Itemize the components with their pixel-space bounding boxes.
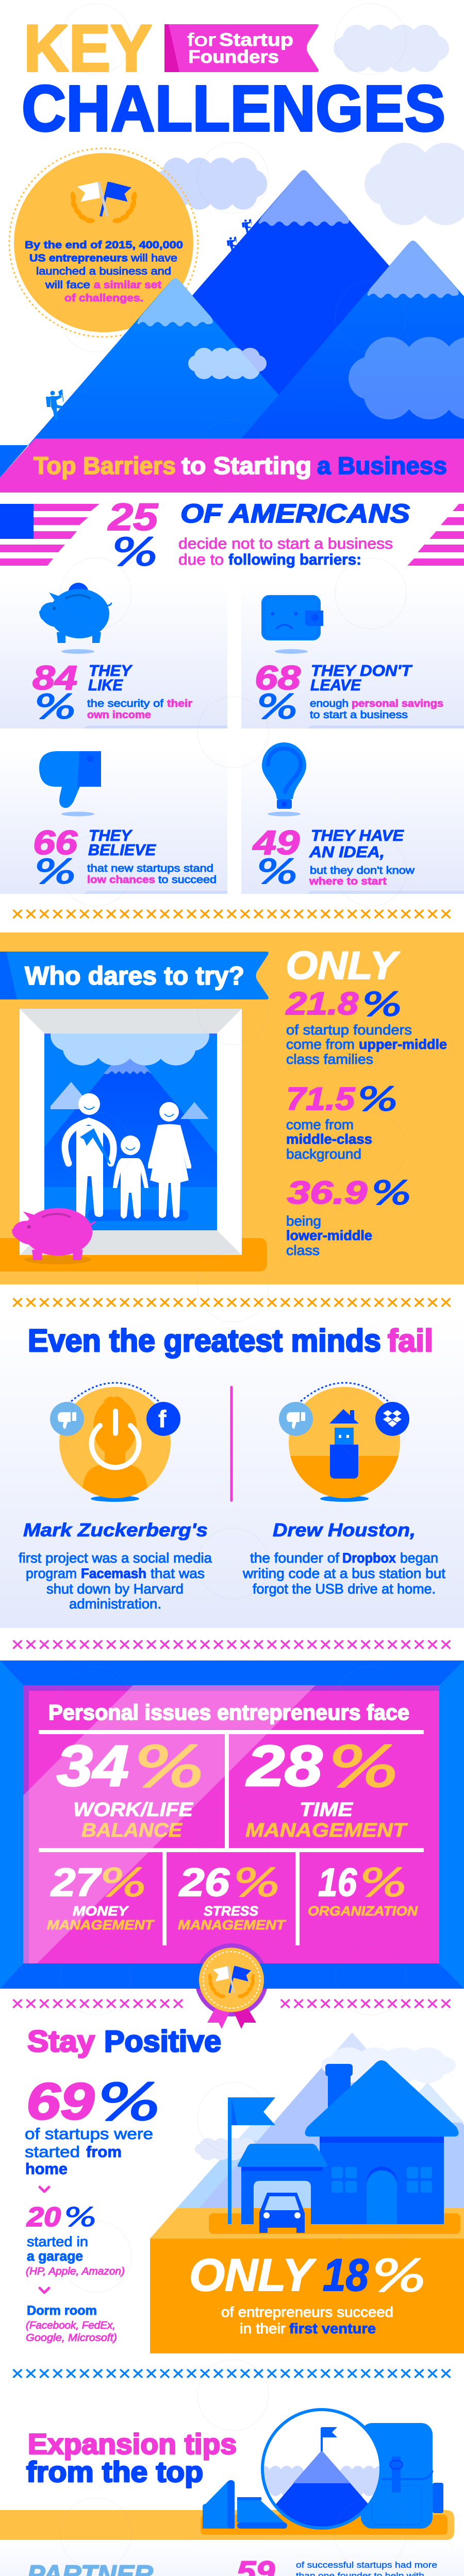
stat: 69%: %	[96, 2073, 162, 2131]
heading: stay positive: Positive	[104, 2025, 221, 2058]
heading: stay positive: Stay	[27, 2025, 95, 2058]
panel: barrier 66%: THEY	[89, 826, 133, 844]
cloud: lower right	[349, 337, 464, 419]
ribbon: who dares to try: Who dares to try?	[25, 961, 244, 990]
text: Drew Houston: Drew Houston,	[273, 1519, 416, 1540]
stat: only 18%: in their	[240, 2320, 286, 2336]
cloud: on front mountain	[188, 348, 267, 379]
text: Mark Zuckerberg: Mark Zuckerberg's	[23, 1519, 208, 1540]
stat: 20% garage: a garage	[27, 2248, 83, 2264]
stat: 71.5%	[286, 1080, 399, 1162]
panel: barrier 68%: 68	[255, 658, 301, 697]
arrow: chevron down	[40, 2187, 49, 2192]
figure: mother	[148, 1102, 191, 1218]
heading: expansion tips	[26, 2428, 237, 2488]
stat: 36.9%: being	[286, 1213, 321, 1229]
stat: 20% garage: %	[63, 2202, 97, 2232]
stat: 27%: %	[99, 1861, 148, 1905]
cloud: top right	[334, 25, 449, 72]
stat: 36.9%: lower-middle	[286, 1228, 372, 1243]
ribbon: for Startup Founders: Startup	[219, 30, 293, 50]
arrow: chevron down	[40, 2288, 49, 2293]
text: dorm room: (Facebook, FedEx,	[26, 2320, 115, 2331]
panel: barrier 68%: enough	[310, 698, 349, 709]
panel: barrier 84%: the security of	[87, 698, 164, 709]
banner: top barriers: a Business	[317, 452, 447, 479]
stat: 27%: 27	[50, 1860, 102, 1905]
stat: 34%: %	[132, 1735, 207, 1800]
icon: pink piggy bank	[8, 1208, 95, 1264]
text: Mark Zuckerberg: program	[26, 1566, 77, 1581]
stat: only 18%: 18	[323, 2249, 369, 2300]
panel: barrier 68%: LEAVE	[310, 676, 361, 694]
stat: 69%: 69	[26, 2073, 94, 2130]
icon: thumbs down	[39, 751, 101, 816]
stat: 21.8%: 21.8	[286, 986, 359, 1022]
stat: 26%: 26	[178, 1860, 230, 1905]
stat: only 18%	[189, 2249, 428, 2336]
panel: barrier 84%	[0, 582, 227, 728]
panel: hero header	[0, 11, 464, 478]
text: Drew Houston: forgot the USB drive at home.	[253, 1581, 436, 1597]
icon: boots	[203, 2480, 287, 2529]
panel: barrier 84%: THEY	[89, 662, 133, 680]
icon: sad wallet	[261, 595, 323, 654]
callout text: US entrepreneurs	[29, 252, 128, 264]
panel: barrier 84%: LIKE	[88, 676, 123, 694]
ribbon: who dares to try	[0, 952, 269, 999]
text: Mark Zuckerberg: administration.	[69, 1596, 161, 1612]
cloud: behind circle	[154, 158, 267, 210]
icon: house	[238, 2060, 458, 2233]
panel: barrier 84%: their	[167, 698, 192, 709]
panel: barrier 68%: THEY DON'T	[311, 662, 413, 680]
text: Mark Zuckerberg	[19, 1519, 212, 1612]
mountain: back	[68, 171, 464, 438]
stat: 71.5%: 71.5	[286, 1081, 356, 1117]
stat: 69%: started	[25, 2143, 80, 2161]
illustration: house scene	[150, 2032, 464, 2353]
text: Mark Zuckerberg: Facemash	[81, 1566, 146, 1581]
illustration: Houston	[279, 1383, 409, 1502]
stat: 16%	[308, 1860, 418, 1919]
text: Drew Houston: writing code at a bus station but	[242, 1566, 446, 1581]
stat: 34%: WORK/LIFE	[73, 1799, 194, 1821]
cloud in window	[51, 1033, 209, 1065]
panel: greatest minds fail	[0, 1316, 464, 1628]
panel: personal issues	[0, 1660, 464, 2016]
window with family	[20, 1005, 242, 1255]
callout text	[25, 240, 183, 304]
panel: barrier 68%: personal savings	[352, 698, 443, 709]
stat: 16%: %	[359, 1861, 408, 1905]
title: CHALLENGES: CHALLENGES	[22, 72, 445, 145]
stat: 71.5%: %	[357, 1080, 399, 1118]
stat: 21.8%: come from	[286, 1037, 355, 1052]
callout circle: 400,000 entrepreneurs	[9, 148, 198, 337]
heading: stay positive	[27, 2025, 221, 2058]
stat: 25% of Americans: %	[111, 531, 159, 574]
panel: barrier 49%: %	[256, 853, 299, 891]
stat: 26%	[178, 1860, 286, 1933]
panel: barrier 84%: own income	[87, 709, 151, 721]
panel: barrier 66%: 66	[33, 823, 78, 861]
panel: barrier 66%: BELIEVE	[88, 841, 156, 859]
stat: 69%: home	[25, 2160, 68, 2178]
mountain snow: right	[368, 241, 459, 298]
text: dorm room: Google, Microsoft)	[26, 2332, 117, 2344]
stat: 21.8%: class families	[286, 1052, 373, 1067]
illustration: Zuckerberg	[50, 1383, 180, 1504]
stat: 34%: 34	[57, 1734, 129, 1798]
tip row: partner up	[0, 2540, 464, 2576]
text: Drew Houston: Dropbox	[342, 1550, 396, 1566]
stat: 27%	[47, 1860, 155, 1933]
flag: left stripes	[0, 504, 100, 566]
panel: barrier 68%: %	[256, 688, 299, 726]
stat: 26%: %	[233, 1861, 281, 1905]
icon: piggy bank	[36, 583, 112, 654]
stat: 21.8%	[286, 986, 447, 1067]
stat: 36.9%	[286, 1174, 412, 1258]
text: Mark Zuckerberg: first project was a social media	[19, 1550, 212, 1566]
title: KEY: KEY	[24, 11, 152, 86]
panel: barrier 84%: 84	[32, 658, 77, 697]
panel: who dares to try	[0, 933, 464, 1284]
banner: top barriers	[0, 438, 464, 493]
mountain: right	[241, 241, 464, 438]
stat: 25% of Americans: OF AMERICANS	[180, 499, 410, 528]
faces	[84, 1107, 174, 1150]
banner: top barriers: to Starting	[181, 452, 311, 479]
stat: only 18%: of entrepreneurs succeed	[221, 2304, 393, 2320]
callout text: will face	[45, 279, 90, 291]
heading: personal issues: Personal issues entrepreneurs face	[48, 1700, 409, 1724]
stat: 25% of Americans	[107, 496, 410, 574]
stat: 26%: STRESS	[204, 1903, 259, 1919]
stat: 36.9%: 36.9	[287, 1175, 368, 1211]
icon: facebook f: f	[158, 1405, 167, 1432]
callout text: will have	[130, 252, 177, 264]
heading: only: ONLY	[286, 944, 401, 988]
panel: barrier 49%: but they don't know	[310, 865, 415, 876]
heading: even the greatest minds fail: fail	[388, 1323, 433, 1358]
text: dorm room	[26, 2303, 117, 2344]
heading: expansion tips: Expansion tips	[28, 2428, 237, 2460]
icon: flags and laurel	[70, 182, 138, 224]
mountain snow: front	[137, 278, 213, 327]
mountain: front	[0, 279, 322, 478]
stat: 69%: of startups were	[25, 2125, 153, 2143]
stat: 71.5%: background	[286, 1146, 361, 1162]
highlight band	[23, 1685, 316, 1963]
text: Drew Houston: began	[400, 1550, 438, 1566]
stat: 20% garage: started in	[27, 2234, 88, 2249]
stat: 69%	[25, 2073, 162, 2178]
panel: barrier 66%: that new startups stand	[87, 863, 213, 874]
icon: climber lower	[227, 236, 237, 252]
stat: 16%: ORGANIZATION	[308, 1903, 418, 1919]
heading: expansion tips: from the top	[26, 2455, 203, 2488]
stat: 21.8%: %	[361, 986, 403, 1023]
stat: 25% of Americans: following barriers:	[228, 551, 361, 568]
icon: medal	[199, 1947, 264, 2029]
text: Drew Houston: the founder of	[250, 1550, 340, 1566]
stat: 28%: TIME	[300, 1799, 354, 1821]
stat: 21.8%: upper-middle	[359, 1037, 447, 1052]
panel: barrier 49%: where to start	[309, 876, 387, 887]
text: dorm room: Dorm room	[27, 2303, 97, 2318]
stat: 16%: 16	[318, 1860, 357, 1905]
panel: barrier 49%	[241, 742, 464, 894]
callout text: a similar set	[94, 279, 161, 291]
stat: 20% garage	[26, 2202, 125, 2277]
text: Mark Zuckerberg: shut down by Harvard	[46, 1581, 184, 1597]
icon: backpack	[361, 2423, 443, 2529]
panel: barrier 68%	[241, 582, 464, 728]
stat: 34%: BALANCE	[81, 1820, 183, 1841]
panel: barrier 84%: %	[34, 688, 77, 726]
stat: 28%: %	[327, 1735, 401, 1800]
stat: 28%	[245, 1734, 408, 1841]
icon: dropbox	[383, 1410, 402, 1427]
panel: expansion tips header	[0, 2409, 454, 2540]
icon: car	[259, 2193, 305, 2233]
mountain snow: back	[259, 170, 349, 226]
panel: barrier 68%: to start a business	[310, 709, 408, 721]
panel: barrier 49%: AN IDEA,	[309, 843, 385, 861]
stat: 25% of Americans: due to	[178, 551, 224, 568]
panel: barrier 66%: to succeed	[158, 874, 217, 886]
cloud: large right	[364, 143, 464, 225]
stat: 69%: from	[86, 2143, 122, 2161]
stat: 27%: MANAGEMENT	[47, 1917, 155, 1933]
panel: barrier 49%: THEY HAVE	[311, 826, 404, 844]
stat: 20% garage: 20	[26, 2202, 61, 2232]
stat: 25% of Americans: decide not to start a business	[178, 535, 393, 552]
stat: only 18%: first venture	[289, 2320, 376, 2336]
stat: 20% garage: (HP, Apple, Amazon)	[26, 2266, 125, 2277]
stat: 27%: MONEY	[73, 1903, 129, 1919]
stat: 21.8%: of startup founders	[286, 1022, 412, 1038]
callout text: of challenges.	[64, 293, 143, 304]
stat: 28%: MANAGEMENT	[245, 1820, 408, 1841]
icon: climber upper	[242, 219, 252, 233]
icon: question bulb	[262, 742, 306, 816]
stat: 28%: 28	[246, 1734, 323, 1798]
stat: 25% of Americans: 25	[107, 496, 159, 538]
grid lines	[39, 1730, 424, 1945]
icon: climber large	[46, 389, 63, 419]
callout text: By the end of 2015, 400,000	[25, 240, 183, 251]
panel: stay positive text	[25, 2025, 221, 2344]
stat: 34%	[57, 1734, 207, 1841]
ribbon: for Startup Founders	[164, 24, 319, 72]
text: Drew Houston	[242, 1519, 446, 1597]
icon: magnified mountain	[261, 2408, 382, 2530]
stat: 36.9%: class	[286, 1243, 320, 1258]
stat: only 18%: ONLY	[189, 2249, 317, 2300]
stat: 26%: MANAGEMENT	[178, 1917, 286, 1933]
icon: flag	[228, 2097, 275, 2224]
shelf	[0, 1238, 267, 1272]
tip row: partner up: of successful startups had more	[296, 2560, 437, 2570]
callout text: launched a business and	[36, 266, 171, 277]
ribbon: for Startup Founders: Founders	[188, 47, 279, 67]
flag: right stripes	[407, 504, 464, 566]
figure: father	[65, 1093, 113, 1217]
divider	[230, 1386, 233, 1502]
panel: barrier 49%: 49	[252, 823, 300, 861]
banner: top barriers: Top Barriers	[34, 452, 176, 479]
mountains in window	[44, 1071, 217, 1187]
stat: 71.5%: middle-class	[286, 1131, 372, 1147]
panel: barrier 66%: low chances	[87, 874, 155, 886]
text: Mark Zuckerberg: that was	[151, 1566, 205, 1581]
panel: barrier 66%	[0, 747, 227, 894]
stat: 71.5%: come from	[286, 1117, 354, 1132]
figure: child	[113, 1136, 148, 1218]
heading: even the greatest minds fail: Even the greatest minds	[28, 1323, 381, 1358]
stat: only 18%: %	[371, 2251, 428, 2302]
panel: barrier 66%: %	[34, 853, 77, 891]
stat: 36.9%: %	[371, 1174, 412, 1212]
ribbon: for Startup Founders: for	[187, 30, 216, 50]
